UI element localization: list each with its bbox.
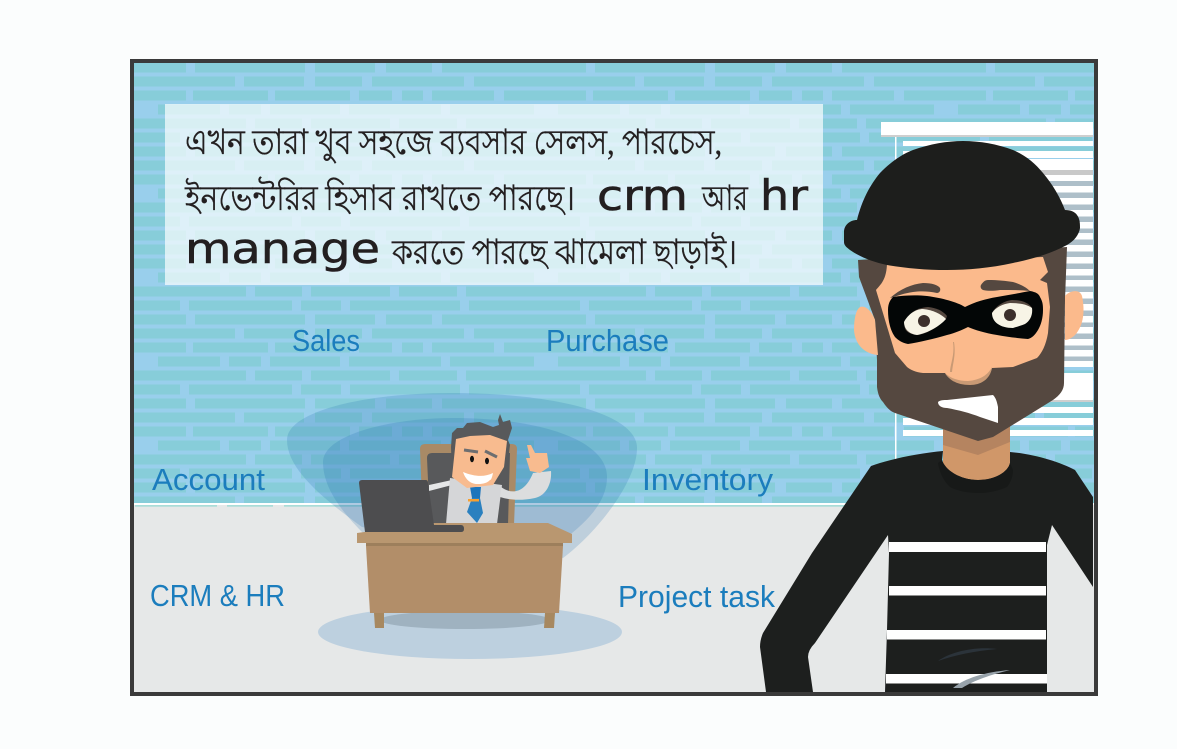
collar [938, 460, 1013, 493]
office chair [420, 444, 517, 525]
left eye [904, 307, 947, 335]
neck [943, 425, 1010, 480]
window with blinds [881, 122, 1093, 505]
text line 3: manage [185, 224, 380, 273]
mask [888, 291, 1043, 344]
smile [463, 472, 493, 484]
text panel [165, 104, 823, 285]
beard [858, 247, 1067, 441]
text line 2: crm [597, 171, 688, 220]
background wall [132, 61, 1096, 505]
right eye [992, 300, 1032, 328]
label: Project task: Project task [618, 579, 775, 614]
raised arm [500, 471, 551, 500]
eyebrows [890, 280, 1030, 298]
text line 2: আর [701, 179, 749, 218]
text line 2: ইনভেন্টরির হিসাব রাখতে পারছে। [184, 177, 575, 218]
label: Purchase: Purchase [546, 323, 669, 358]
eyes and brows [464, 450, 497, 464]
text line 3: করতে পারছে ঝামেলা ছাড়াই। [391, 232, 737, 272]
thief [760, 141, 1093, 692]
floor [132, 503, 1096, 694]
mouth [938, 395, 998, 423]
label: CRM & HR: CRM & HR [150, 578, 285, 613]
face [876, 257, 1050, 384]
left ear [854, 307, 878, 355]
label: Inventory: Inventory [642, 462, 774, 497]
desk [357, 523, 572, 628]
hand [526, 445, 549, 473]
label: Account: Account [152, 462, 265, 497]
label: Sales: Sales [292, 323, 360, 358]
nose shading [945, 342, 992, 385]
shirt [446, 478, 502, 524]
tie [467, 487, 483, 523]
right ear [1065, 291, 1084, 340]
sweater [760, 451, 1093, 692]
text line 2: hr [760, 171, 809, 220]
frame border [132, 61, 1096, 694]
floor shadow [318, 605, 622, 659]
text line 3 [185, 224, 737, 273]
bengali text line 1: এখন তারা খুব সহজে ব্যবসার সেলস, পারচেস, [185, 123, 722, 164]
protective halo [287, 393, 637, 558]
beanie [844, 141, 1080, 270]
stripes [886, 542, 1047, 684]
text line 2 [184, 171, 809, 220]
businessman [429, 414, 551, 524]
laptop [359, 480, 464, 532]
hair [451, 414, 512, 478]
head [452, 435, 507, 488]
left arm [429, 480, 452, 491]
sweater creases [938, 648, 1010, 688]
